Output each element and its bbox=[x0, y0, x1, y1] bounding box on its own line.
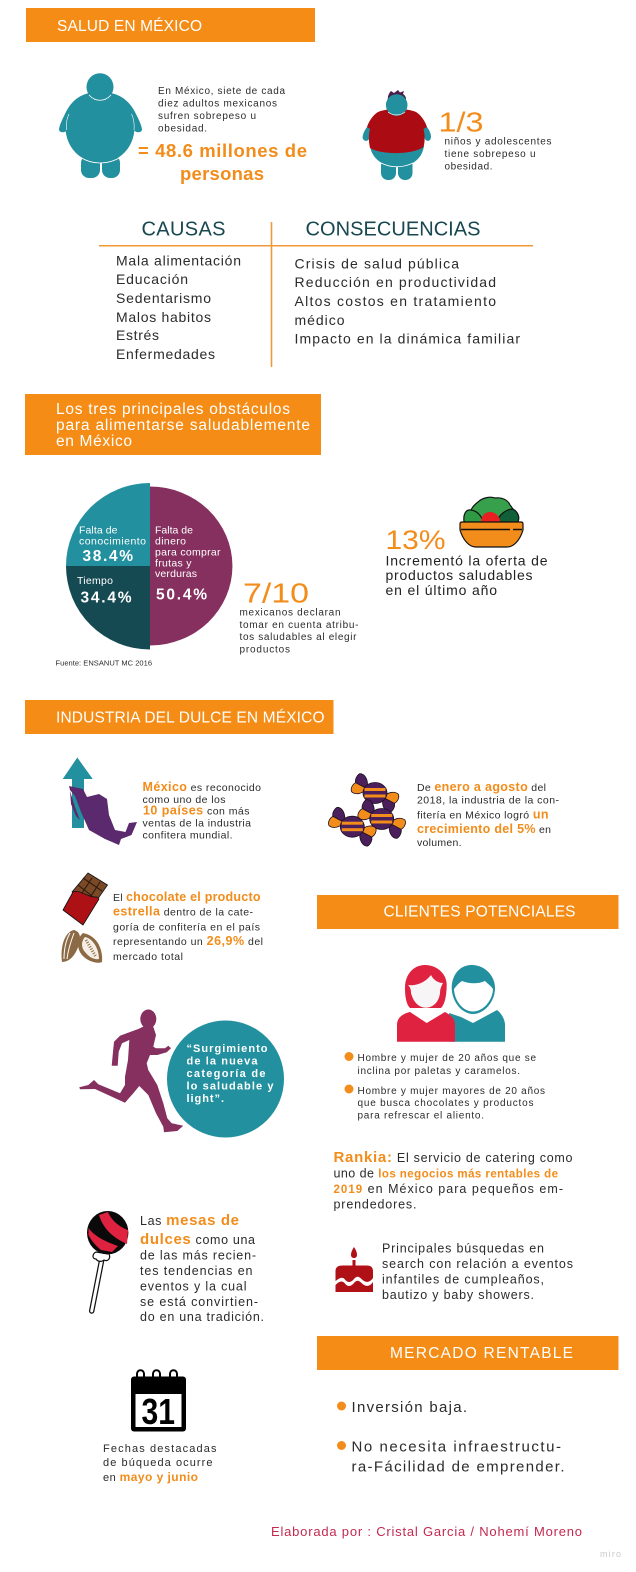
text: crecimiento 5%: crecimiento del 5% en bbox=[417, 822, 551, 836]
source note: Fuente: ENSANUT MC 2016 bbox=[56, 658, 152, 668]
text: mesas de dulces: dulces como una bbox=[140, 1231, 255, 1248]
callout: surgimiento: de la nueva bbox=[186, 1056, 258, 1068]
text: 13% statistic: en el último año bbox=[386, 582, 497, 598]
text: adult statistic: = 48.6 millones de bbox=[138, 140, 307, 161]
text: crecimiento 5%: fitería en México logró un bbox=[417, 808, 548, 822]
pie chart: obstáculos: Falta de bbox=[79, 524, 118, 536]
pie chart: obstáculos: 50.4% bbox=[156, 586, 207, 604]
icon: candies bbox=[326, 772, 408, 847]
text: mesas de dulces: Las mesas de bbox=[140, 1212, 239, 1229]
text: adult statistic bbox=[138, 86, 307, 184]
text: crecimiento 5%: De enero a agosto del bbox=[417, 780, 546, 794]
list: consecuencias: médico bbox=[294, 312, 345, 328]
text: principales búsquedas: Principales búsquedas en bbox=[382, 1242, 544, 1256]
heading: causas: CAUSAS bbox=[142, 218, 226, 240]
header: tres obstáculos: para alimentarse saludablemente bbox=[56, 417, 310, 434]
table dividers bbox=[99, 222, 533, 367]
header: clientes potenciales: CLIENTES POTENCIALES bbox=[384, 904, 576, 920]
icon: obese child bbox=[363, 90, 431, 180]
heading: consecuencias: CONSECUENCIAS bbox=[306, 218, 480, 240]
icon: cocoa pods bbox=[62, 930, 102, 963]
header: salud en México: SALUD EN MÉXICO bbox=[57, 18, 202, 35]
list: causas: Enfermedades bbox=[116, 346, 215, 362]
list: client profiles: Hombre y mujer de 20 años que se bbox=[358, 1053, 536, 1064]
text: child statistic: obesidad. bbox=[444, 162, 492, 172]
callout: surgimiento: light”. bbox=[186, 1093, 224, 1105]
icon: calendar: 31 bbox=[142, 1391, 175, 1432]
text: México top 10: confitera mundial. bbox=[142, 830, 232, 842]
text: fechas destacadas: Fechas destacadas bbox=[103, 1443, 217, 1455]
text: adult statistic: En México, siete de cada bbox=[158, 86, 285, 97]
header: mercado rentable bbox=[317, 1336, 618, 1370]
text: 7/10 statistic: productos bbox=[240, 644, 290, 656]
callout: surgimiento: “Surgimiento bbox=[186, 1043, 268, 1055]
icon: chocolate bar bbox=[63, 873, 108, 925]
pie chart: obstáculos: conocimiento bbox=[79, 536, 146, 548]
list: consecuencias bbox=[294, 256, 520, 346]
list: consecuencias: Crisis de salud pública bbox=[294, 256, 459, 272]
text: principales búsquedas: bautizo y baby showers. bbox=[382, 1288, 534, 1302]
list: causas bbox=[116, 252, 241, 362]
text: fechas destacadas: en mayo y junio bbox=[103, 1470, 198, 1484]
icon: runner bbox=[79, 1010, 183, 1132]
text: México top 10: ventas de la industria bbox=[142, 818, 251, 830]
text: chocolate estrella: representando un 26,9% del bbox=[113, 934, 263, 948]
text: principales búsquedas bbox=[382, 1242, 573, 1302]
header: industria del dulce bbox=[25, 700, 334, 734]
pie chart: obstáculos: frutas y bbox=[155, 558, 192, 570]
text: adult statistic: obesidad. bbox=[158, 124, 207, 134]
text: 13% statistic: Incrementó la oferta de bbox=[386, 552, 548, 568]
text: crecimiento 5% bbox=[417, 780, 560, 849]
text: fechas destacadas: de búqueda ocurre bbox=[103, 1457, 212, 1469]
text: 7/10 statistic: tomar en cuenta atribu- bbox=[240, 620, 358, 631]
icon: salad bowl bbox=[460, 497, 523, 547]
list: consecuencias: Reducción en productividad bbox=[294, 274, 496, 290]
list: consecuencias: Impacto en la dinámica familiar bbox=[294, 330, 520, 346]
header: industria del dulce: INDUSTRIA DEL DULCE EN MÉXICO bbox=[56, 710, 324, 726]
list: causas: Malos habitos bbox=[116, 309, 211, 325]
watermark: miro bbox=[600, 1549, 621, 1559]
text: mesas de dulces: se está convirtien- bbox=[140, 1295, 258, 1309]
text: 7/10 statistic: mexicanos declaran bbox=[240, 608, 340, 618]
text: chocolate estrella: goría de confitería en el país bbox=[113, 922, 260, 934]
list: mercado rentable: No necesita infraestructu- bbox=[352, 1438, 561, 1456]
text: Rankia: 2019 en México para pequeños em- bbox=[334, 1182, 563, 1196]
list: causas: Estrés bbox=[116, 327, 159, 343]
icon: calendar bbox=[131, 1370, 186, 1432]
list: client profiles: que busca chocolates y productos bbox=[358, 1098, 534, 1109]
list: causas: Mala alimentación bbox=[116, 252, 241, 268]
header: mercado rentable: MERCADO RENTABLE bbox=[390, 1345, 573, 1362]
pie chart: obstáculos: verduras bbox=[155, 568, 197, 580]
text: child statistic: tiene sobrepeso u bbox=[444, 149, 536, 160]
text: México top 10 bbox=[142, 780, 261, 842]
text: mesas de dulces bbox=[140, 1212, 264, 1324]
pie chart: obstáculos: dinero bbox=[155, 536, 186, 548]
text: child statistic: niños y adolescentes bbox=[444, 136, 552, 148]
pie chart: obstáculos: para comprar bbox=[155, 546, 221, 558]
text: crecimiento 5%: 2018, la industria de la con- bbox=[417, 794, 560, 806]
list: client profiles bbox=[344, 1052, 545, 1122]
text: child statistic bbox=[438, 106, 552, 172]
text: Rankia bbox=[334, 1149, 573, 1212]
header: tres obstáculos: Los tres principales obstáculos bbox=[56, 401, 290, 418]
list: mercado rentable: Inversión baja. bbox=[352, 1399, 467, 1416]
text: 13% statistic: 13% bbox=[386, 525, 446, 555]
text: chocolate estrella: mercado total bbox=[113, 951, 183, 963]
list: mercado rentable bbox=[337, 1399, 564, 1476]
text: Rankia: prendedores. bbox=[334, 1198, 416, 1212]
pie chart: obstáculos bbox=[66, 483, 232, 650]
text: 7/10 statistic: tos saludables al elegir bbox=[240, 632, 357, 643]
list: consecuencias: Altos costos en tratamiento bbox=[294, 293, 496, 309]
pie chart: obstáculos: Tiempo bbox=[77, 575, 113, 587]
header: salud en México bbox=[26, 8, 315, 42]
text: fechas destacadas bbox=[103, 1443, 217, 1484]
text: México top 10: como uno de los bbox=[142, 794, 226, 806]
text: principales búsquedas: infantiles de cumpleaños, bbox=[382, 1272, 544, 1286]
pie chart: obstáculos: 38.4% bbox=[82, 548, 133, 565]
callout: surgimiento bbox=[167, 1020, 284, 1138]
pie chart: obstáculos: 34.4% bbox=[80, 590, 132, 606]
text: 13% statistic bbox=[386, 525, 548, 598]
callout: surgimiento: categoría de bbox=[186, 1068, 266, 1080]
icon: lollipop bbox=[87, 1211, 128, 1311]
icon: arrow and map of Mexico bbox=[63, 758, 137, 845]
icon: man and woman bbox=[397, 965, 505, 1042]
header: tres obstáculos: en México bbox=[56, 433, 132, 450]
text: child statistic: 1/3 bbox=[438, 106, 484, 138]
list: causas: Sedentarismo bbox=[116, 290, 211, 306]
text: mesas de dulces: de las más recien- bbox=[140, 1248, 256, 1262]
text: chocolate estrella bbox=[113, 890, 263, 963]
text: 13% statistic: productos saludables bbox=[386, 567, 532, 583]
callout: surgimiento: lo saludable y bbox=[186, 1080, 274, 1092]
list: client profiles: inclina por paletas y caramelos. bbox=[358, 1066, 520, 1077]
text: México top 10: México es reconocido bbox=[142, 780, 261, 794]
icon: obese adult bbox=[59, 73, 142, 178]
text: Rankia: uno de los negocios más rentables de bbox=[334, 1166, 558, 1180]
credits: Elaborada por : Cristal Garcia / Nohemí Moreno bbox=[271, 1524, 582, 1539]
text: 7/10 statistic bbox=[240, 578, 358, 656]
header: tres obstáculos bbox=[25, 394, 321, 455]
text: adult statistic: diez adultos mexicanos bbox=[158, 98, 277, 110]
pie chart: obstáculos: Falta de bbox=[155, 524, 193, 536]
text: chocolate estrella: El chocolate el producto bbox=[113, 890, 261, 904]
text: Rankia: Rankia: El servicio de catering como bbox=[334, 1149, 573, 1166]
list: client profiles: para refrescar el aliento. bbox=[358, 1110, 484, 1122]
text: principales búsquedas: search con relación a eventos bbox=[382, 1257, 573, 1271]
text: adult statistic: sufren sobrepeso u bbox=[158, 111, 256, 122]
text: adult statistic: personas bbox=[180, 163, 264, 184]
list: causas: Educación bbox=[116, 271, 188, 287]
text: chocolate estrella: estrella dentro de la cate- bbox=[113, 904, 254, 918]
header: clientes potenciales bbox=[317, 895, 618, 929]
text: 7/10 statistic: 7/10 bbox=[243, 578, 309, 608]
list: mercado rentable: ra-Fácilidad de emprender. bbox=[352, 1458, 564, 1476]
text: crecimiento 5%: volumen. bbox=[417, 837, 462, 849]
text: México top 10: 10 países con más bbox=[143, 804, 250, 818]
text: mesas de dulces: eventos y la cual bbox=[140, 1280, 246, 1294]
text: mesas de dulces: do en una tradición. bbox=[140, 1310, 264, 1324]
text: mesas de dulces: tes tendencias en bbox=[140, 1264, 253, 1278]
list: client profiles: Hombre y mujer mayores de 20 años bbox=[358, 1086, 545, 1097]
icon: birthday cake bbox=[336, 1247, 373, 1292]
